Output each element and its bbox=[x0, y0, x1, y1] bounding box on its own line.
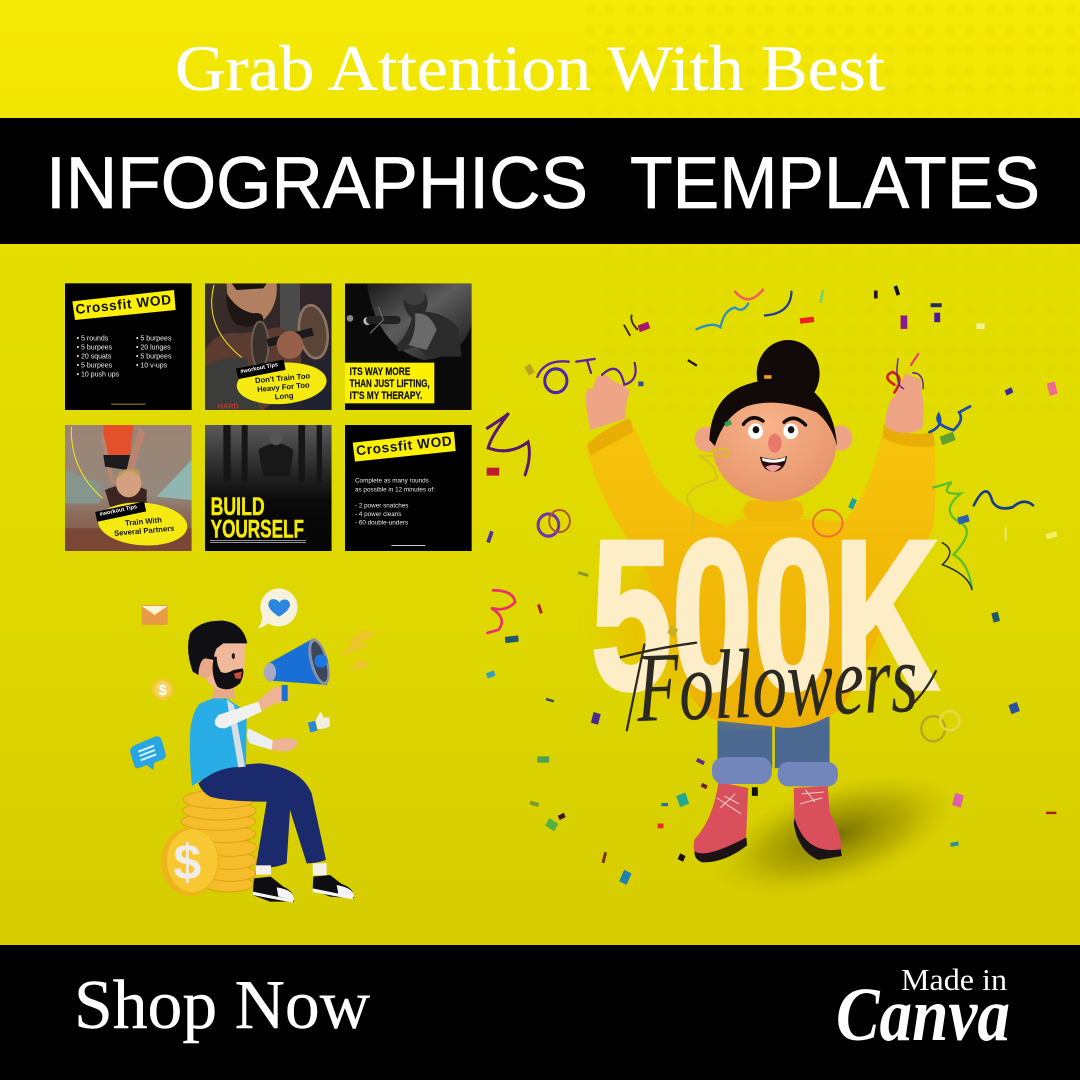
thumbnail: Crossfit WOD list: • 20 lunges bbox=[136, 344, 171, 351]
thumbnail: It's way more than just lifting bbox=[345, 283, 472, 410]
thumbnail: Crossfit WOD list: • 5 burpees bbox=[77, 344, 113, 351]
heading: Infographics Templates: INFOGRAPHICS bbox=[46, 143, 588, 224]
icon: dollar coin small bbox=[152, 678, 174, 700]
thumbnail: Train With Several Partners: #workout Tips bbox=[99, 504, 138, 518]
thumbnail: It's way more than just lifting: THAN JUST LIFTING, bbox=[350, 378, 430, 390]
illustration: 500K followers character with confetti bbox=[486, 285, 1058, 922]
thumbnail: Crossfit WOD rounds: as possible in 12 minutes of: bbox=[355, 486, 435, 493]
sweater bbox=[585, 418, 936, 728]
thumbnail: Crossfit WOD list: • 5 rounds bbox=[77, 335, 109, 342]
thumbnail: Don't Train Too Heavy: Long bbox=[274, 391, 294, 401]
thumbnail: Build Yourself: BUILD bbox=[211, 493, 265, 521]
call to action: Shop Now: Shop Now bbox=[74, 967, 370, 1044]
icon: thumbs up bbox=[308, 712, 330, 732]
head bbox=[712, 387, 836, 501]
icon: chat bubble bbox=[130, 736, 166, 770]
icon: heart speech bubble bbox=[258, 588, 298, 628]
thumbnail: Crossfit WOD list: Crossfit WOD bbox=[75, 292, 172, 317]
thumbnail: Train With Several Partners: Train With bbox=[125, 515, 163, 528]
coin stack: $ bbox=[173, 834, 201, 890]
header strip bbox=[0, 0, 1080, 118]
thumbnail: Crossfit WOD rounds: Complete as many rounds bbox=[355, 478, 429, 485]
thumbnail: Crossfit WOD rounds: - 2 power snatches bbox=[355, 503, 408, 510]
icon: dollar coin small: $ bbox=[159, 683, 167, 699]
thumbnail: Crossfit WOD list: • 5 burpees bbox=[136, 354, 172, 361]
thumbnail: Don't Train Too Heavy: Heavy For Too bbox=[257, 380, 310, 394]
thumbnail: Don't Train Too Heavy: #workout Tips bbox=[240, 362, 279, 375]
ground shadow bbox=[701, 749, 969, 922]
thumbnail: Don't Train Too Heavy bbox=[205, 283, 332, 411]
thumbnail: Crossfit WOD list: • 10 v-ups bbox=[136, 363, 168, 370]
thumbnail: Crossfit WOD list: • 5 burpees bbox=[77, 363, 113, 370]
thumbnail: Build Yourself: YOURSELF bbox=[211, 515, 304, 543]
thumbnail: Don't Train Too Heavy: HARD bbox=[218, 402, 239, 411]
woman character bbox=[576, 340, 936, 862]
hair bbox=[709, 379, 837, 446]
badge: Made in Canva: Canva bbox=[836, 973, 1010, 1057]
thumbnail: Crossfit WOD list: • 10 push ups bbox=[77, 372, 120, 379]
heading: Infographics Templates: TEMPLATES bbox=[630, 143, 1040, 224]
thumbnail: It's way more than just lifting: ITS WAY MORE bbox=[350, 366, 411, 378]
illustration: man with megaphone on coins bbox=[130, 588, 377, 903]
glow behind number bbox=[576, 503, 931, 733]
script: Followers: Followers bbox=[634, 623, 919, 743]
boots bbox=[694, 782, 842, 862]
heading: Infographics Templates bbox=[46, 143, 1040, 224]
thumbnail: Train With Several Partners: Several Partners bbox=[114, 524, 175, 538]
face features bbox=[743, 418, 806, 472]
thumbnail: It's way more than just lifting: IT'S MY THERAPY. bbox=[350, 390, 422, 402]
bun bbox=[757, 340, 820, 407]
thumbnail: Crossfit WOD rounds: Crossfit WOD bbox=[355, 433, 453, 458]
thumbnail: Train With Several Partners bbox=[65, 425, 192, 551]
man figure bbox=[188, 621, 354, 903]
thumbnail: Crossfit WOD rounds bbox=[345, 425, 472, 551]
confetti pieces bbox=[486, 285, 1058, 885]
black title band bbox=[0, 118, 1080, 244]
hands bbox=[586, 375, 630, 430]
thumbnail: Don't Train Too Heavy: Don't Train Too bbox=[255, 371, 311, 385]
thumbnail: Crossfit WOD rounds: - 4 power cleans bbox=[355, 511, 401, 518]
title line: Grab Attention With Best: Grab Attention With Best bbox=[175, 33, 885, 105]
thumbnail: Build Yourself bbox=[205, 425, 332, 551]
coin stack bbox=[161, 790, 257, 896]
icon: lightning bolts bbox=[338, 630, 377, 670]
black footer band bbox=[0, 945, 1080, 1080]
thumbnail: Crossfit WOD list: • 5 burpees bbox=[136, 335, 172, 342]
thumbnail: Crossfit WOD rounds: - 60 double-unders bbox=[355, 519, 408, 526]
number: 500K: 500K bbox=[591, 496, 939, 734]
megaphone bbox=[264, 636, 334, 687]
badge: Made in Canva: Made in bbox=[901, 962, 1008, 997]
panel: template thumbnails grid bbox=[65, 283, 472, 551]
confetti ribbons bbox=[487, 290, 1033, 741]
thumbnail: Crossfit WOD list bbox=[65, 283, 192, 410]
ears bbox=[695, 427, 718, 452]
shorts bbox=[717, 717, 830, 768]
icon: envelope bbox=[142, 605, 168, 625]
thumbnail: Crossfit WOD list: • 20 squats bbox=[77, 354, 112, 361]
